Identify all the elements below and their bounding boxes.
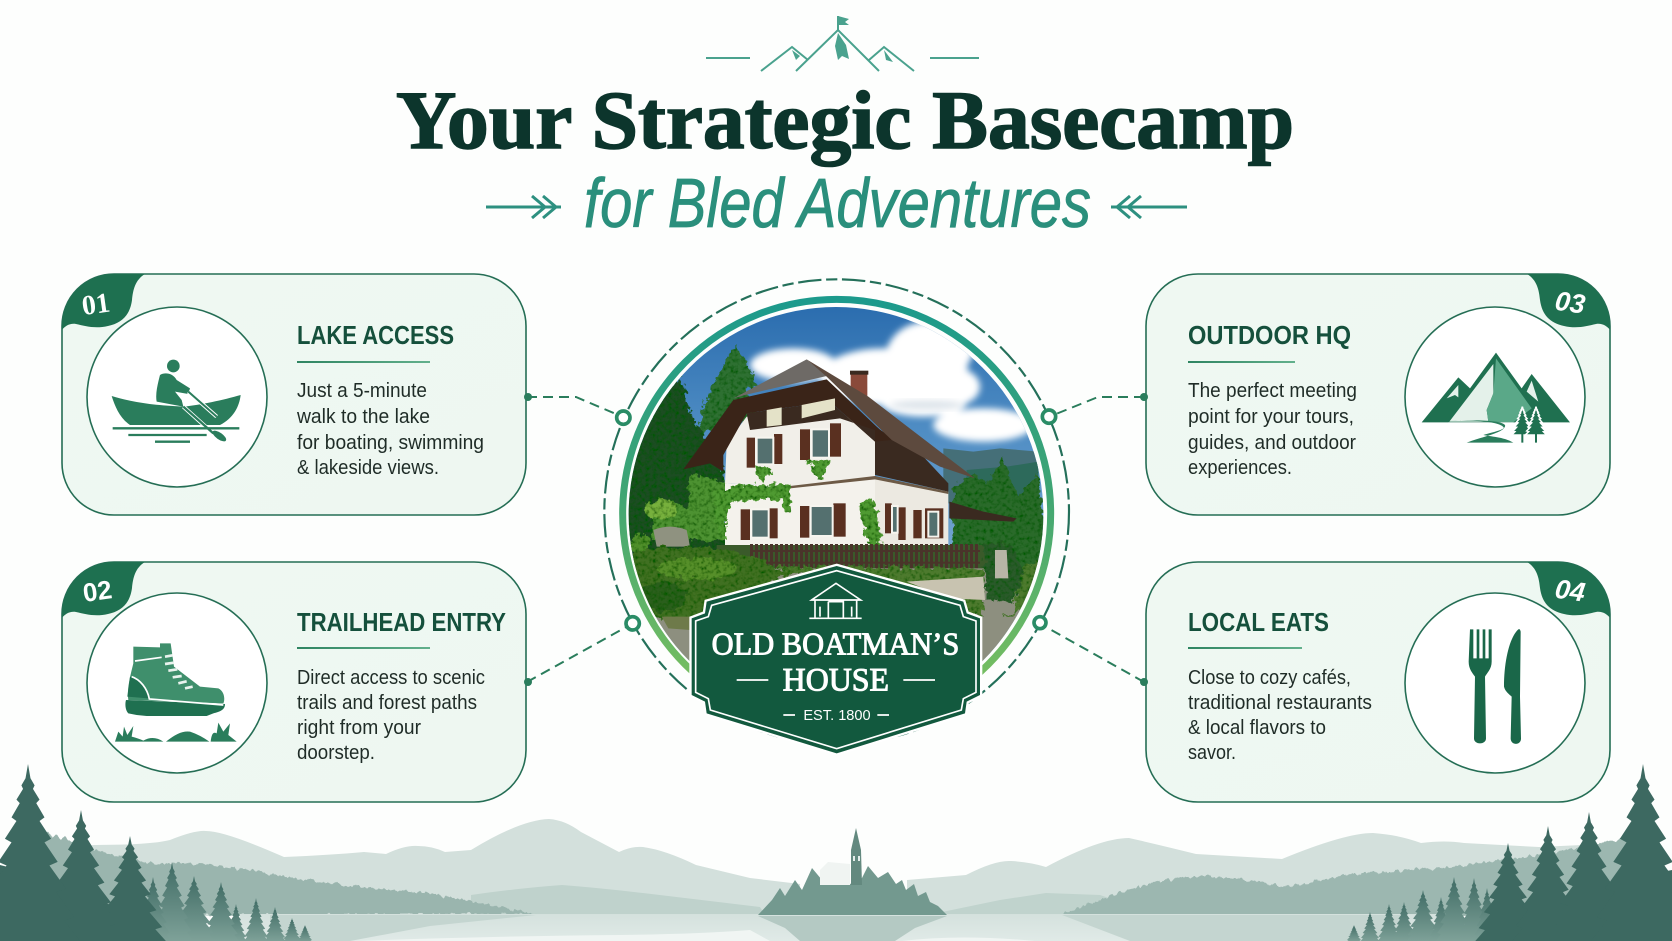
background trees — [623, 345, 1050, 570]
number tab — [1527, 562, 1610, 618]
planting behind fence — [716, 545, 988, 568]
card background — [62, 274, 526, 515]
right faint hill — [942, 893, 1130, 915]
far mountains left — [60, 819, 800, 916]
icon: mountains — [1422, 353, 1570, 447]
body text — [297, 667, 485, 764]
icon: hiking boot — [115, 643, 237, 742]
house walls — [725, 417, 875, 487]
lake reflections — [270, 915, 1400, 941]
connectors from cards to the centre — [527, 397, 1144, 682]
mountain logo — [706, 16, 979, 71]
icon circle — [1405, 307, 1585, 487]
icon: house outline — [809, 583, 862, 618]
body text: walk to the lake — [296, 406, 430, 428]
centre medallion — [604, 279, 1069, 753]
connector nodes — [617, 410, 1056, 630]
heading: LOCAL EATS — [1188, 607, 1329, 637]
number tab — [62, 274, 145, 330]
body text: doorstep. — [297, 742, 375, 764]
body text: for boating, swimming — [297, 432, 484, 454]
lake highlights — [354, 930, 1035, 941]
heading: TRAILHEAD ENTRY — [297, 607, 506, 637]
chimney — [850, 374, 868, 396]
body text: & lakeside views. — [297, 457, 439, 479]
panel: outdoor hq — [1146, 274, 1610, 515]
body text: trails and forest paths — [297, 692, 477, 714]
icon: rowboat — [112, 360, 241, 443]
body text — [1188, 380, 1357, 479]
number 04: 04 — [1553, 574, 1587, 608]
garden and ground — [636, 568, 1036, 662]
forested hills right — [1062, 835, 1640, 916]
body text — [1188, 667, 1372, 764]
body text: right from your — [297, 717, 421, 739]
forested ridge left — [40, 830, 536, 916]
panel: lake access — [62, 274, 526, 515]
card background — [1146, 274, 1610, 515]
body text: point for your tours, — [1188, 406, 1354, 428]
heading: OUTDOOR HQ — [1188, 320, 1351, 350]
body text: & local flavors to — [1188, 717, 1326, 739]
body text: traditional restaurants — [1188, 692, 1372, 714]
island with church — [758, 828, 947, 941]
body text: guides, and outdoor — [1188, 432, 1356, 454]
subtitle: for Bled Adventures — [584, 164, 1091, 242]
annex roof — [949, 502, 1017, 522]
windows — [741, 423, 943, 540]
tall trees left — [0, 764, 167, 941]
lake — [240, 914, 1440, 941]
body text: Close to cozy cafés, — [1188, 667, 1351, 689]
card background — [1146, 562, 1610, 802]
body text: The perfect meeting — [1188, 380, 1357, 402]
icon circle — [87, 307, 267, 487]
number tab — [62, 562, 145, 618]
badge name line 2: HOUSE — [783, 663, 889, 699]
panel: local eats — [1146, 562, 1610, 802]
name badge — [692, 566, 980, 753]
badge name line 1: OLD BOATMAN’S — [712, 625, 959, 661]
tall trees right — [1474, 764, 1672, 941]
body text: experiences. — [1188, 457, 1292, 479]
body text: Just a 5-minute — [297, 380, 427, 402]
arrow left of subtitle — [486, 196, 561, 218]
badge inner line — [696, 571, 976, 749]
icon: fork and knife — [1469, 629, 1521, 744]
heading: LAKE ACCESS — [297, 320, 454, 350]
connector end dots — [524, 393, 1148, 686]
body text: Direct access to scenic — [297, 667, 485, 689]
hedge — [630, 501, 797, 623]
gradient ring — [623, 299, 1051, 727]
arrow right of subtitle — [1111, 196, 1187, 218]
fence — [750, 544, 978, 568]
badge flourishes — [737, 680, 935, 715]
icon circle — [87, 593, 267, 773]
forest right — [1346, 877, 1501, 941]
body text: savor. — [1188, 742, 1236, 764]
title: Your Strategic Basecamp — [396, 74, 1294, 166]
dashed outer ring — [604, 279, 1069, 744]
house photo — [628, 307, 1044, 662]
number tab — [1527, 274, 1610, 330]
heading rule — [297, 647, 430, 649]
heading rule — [297, 361, 430, 363]
card background — [62, 562, 526, 802]
forest left — [134, 862, 313, 941]
badge established date: EST. 1800 — [803, 708, 871, 724]
heading rule — [1188, 361, 1295, 363]
ivy — [715, 460, 883, 545]
panel: trailhead entry — [62, 562, 526, 802]
landscape: mountains, lake and forest — [0, 764, 1672, 941]
body text — [296, 380, 484, 479]
icon circle — [1405, 593, 1585, 773]
heading rule — [1188, 647, 1302, 649]
roof — [733, 359, 827, 398]
number 03: 03 — [1553, 286, 1587, 320]
far mountains right — [907, 833, 1620, 916]
number 01: 01 — [80, 287, 112, 322]
number 02: 02 — [81, 574, 114, 608]
badge shape — [692, 566, 980, 753]
centre hill — [471, 885, 765, 915]
